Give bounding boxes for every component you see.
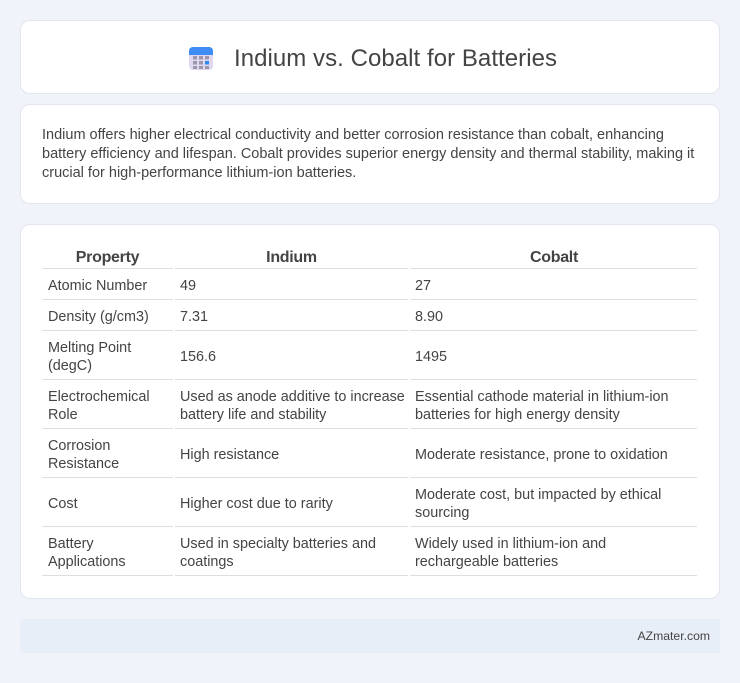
comparison table: sourcing <box>415 505 469 521</box>
icon: calendar <box>189 47 213 70</box>
comparison table: 27 <box>415 278 431 294</box>
comparison table: Higher cost due to rarity <box>180 496 333 512</box>
comparison table: 8.90 <box>415 309 443 325</box>
intro paragraph: battery efficiency and lifespan. Cobalt provides superior energy density and thermal stability, making it <box>42 146 694 162</box>
comparison table: 1495 <box>415 349 447 365</box>
comparison table: Role <box>48 407 78 423</box>
footer credit: AZmater.com <box>638 629 710 643</box>
footer bar <box>20 619 720 653</box>
title: Indium vs. Cobalt for Batteries <box>234 45 557 72</box>
comparison table: Essential cathode material in lithium-ion <box>415 389 669 405</box>
intro paragraph: crucial for high-performance lithium-ion batteries. <box>42 165 356 181</box>
comparison table: Corrosion <box>48 438 110 454</box>
comparison table: Density (g/cm3) <box>48 309 149 325</box>
comparison table: Moderate cost, but impacted by ethical <box>415 487 661 503</box>
comparison table: Widely used in lithium-ion and <box>415 536 606 552</box>
comparison table: 49 <box>180 278 196 294</box>
comparison table: Cost <box>48 496 78 512</box>
comparison table: Electrochemical <box>48 389 150 405</box>
comparison table: Atomic Number <box>48 278 147 294</box>
comparison table: Moderate resistance, prone to oxidation <box>415 447 668 463</box>
comparison table: 156.6 <box>180 349 216 365</box>
intro text panel <box>20 104 720 204</box>
comparison table: Used in specialty batteries and <box>180 536 376 552</box>
comparison table panel <box>20 224 720 599</box>
intro paragraph: Indium offers higher electrical conductivity and better corrosion resistance than cobalt, enhancing <box>42 127 664 143</box>
comparison table: High resistance <box>180 447 279 463</box>
comparison table: batteries for high energy density <box>415 407 620 423</box>
intro paragraph <box>42 127 694 181</box>
comparison table: Indium <box>266 249 317 266</box>
comparison table: Resistance <box>48 456 119 472</box>
comparison table: Cobalt <box>530 249 578 266</box>
comparison table: battery life and stability <box>180 407 326 423</box>
comparison table: coatings <box>180 554 234 570</box>
comparison table: Melting Point <box>48 340 131 356</box>
comparison table: Property <box>76 249 139 266</box>
comparison table: Battery <box>48 536 94 552</box>
comparison table: 7.31 <box>180 309 208 325</box>
comparison table: Used as anode additive to increase <box>180 389 405 405</box>
header panel <box>20 20 720 94</box>
comparison table: rechargeable batteries <box>415 554 558 570</box>
comparison table: Applications <box>48 554 126 570</box>
comparison table: (degC) <box>48 358 92 374</box>
comparison table <box>42 249 697 576</box>
